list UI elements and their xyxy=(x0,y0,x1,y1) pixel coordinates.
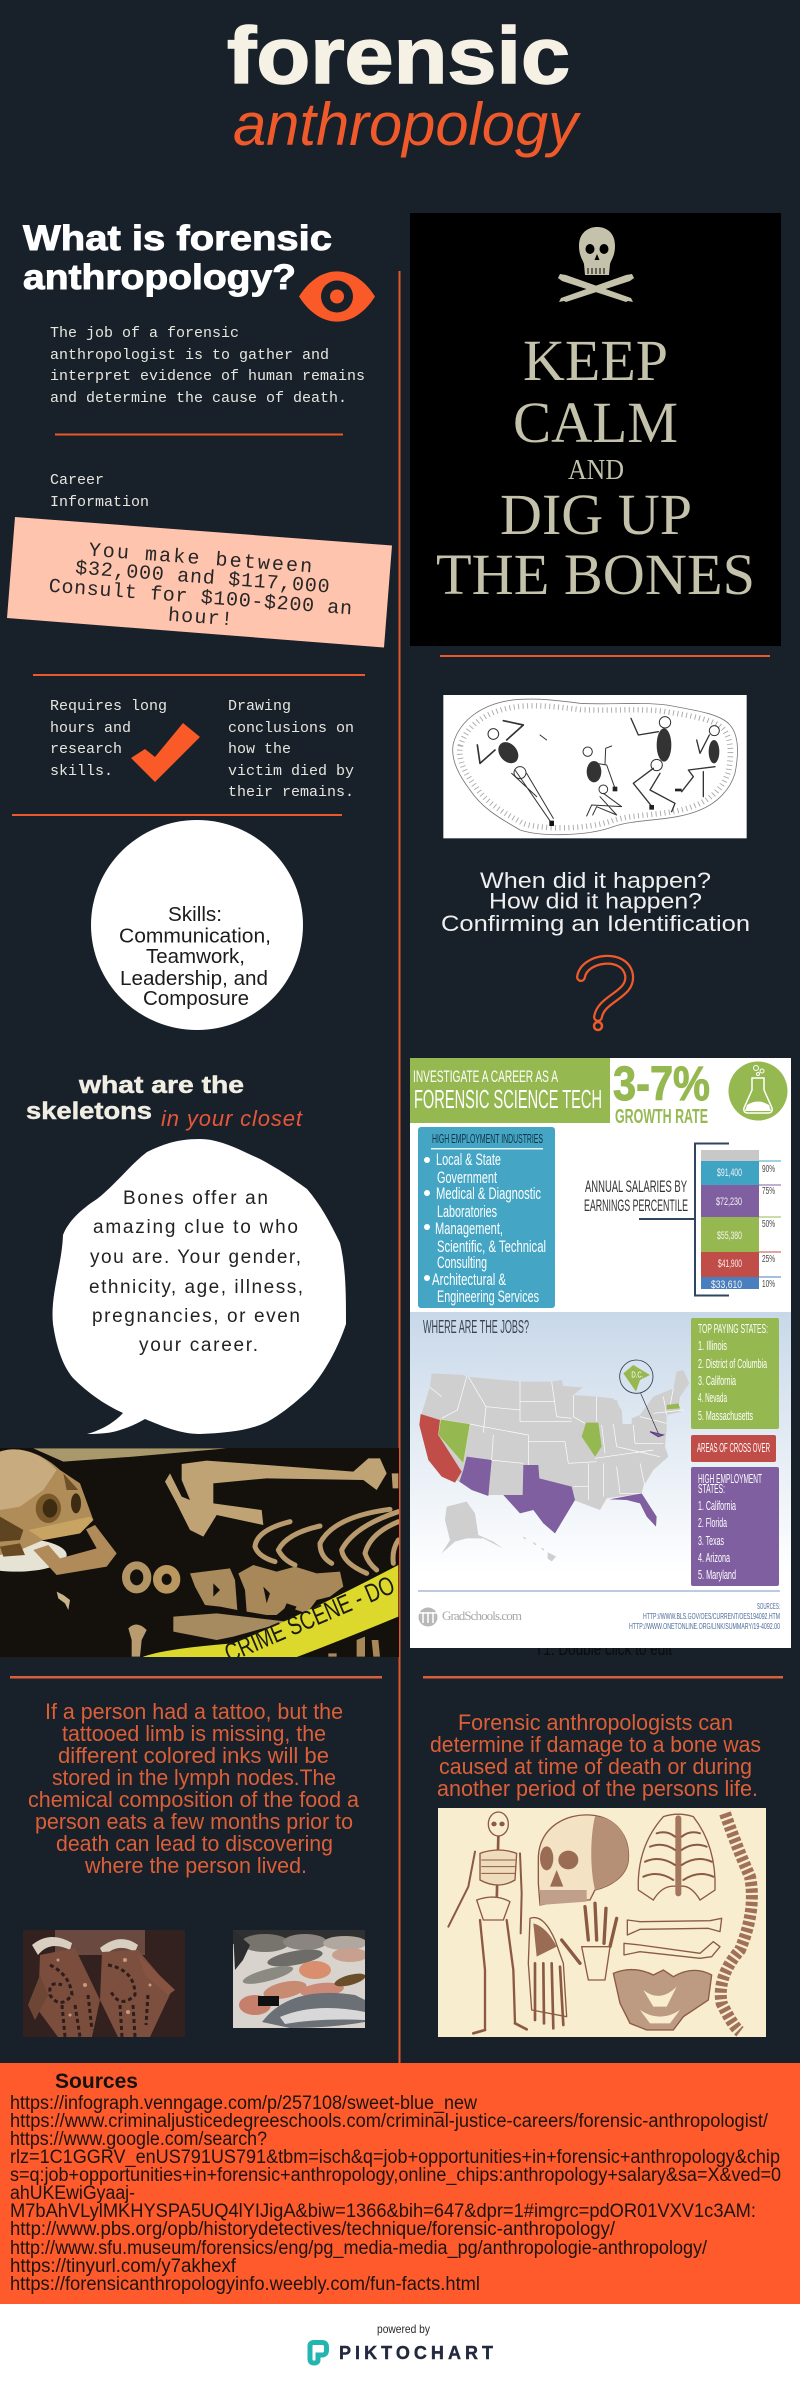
definition text xyxy=(50,325,365,407)
footer: powered by piktochart: powered by xyxy=(377,2322,430,2336)
long bones xyxy=(627,1918,722,1935)
bar chart: salaries by percentile: 10% xyxy=(762,1279,775,1290)
panel: sources: https://forensicanthropologyinfo.weebly.com/fun-facts.html xyxy=(10,2274,480,2295)
text: bone damage: Forensic anthropologists can xyxy=(458,1710,733,1735)
panel: high employment states: 5. Maryland xyxy=(698,1568,736,1582)
skeleton xyxy=(448,1812,527,2033)
icon: piktochart logo xyxy=(310,2342,326,2363)
hidden placeholder text under infographic: T1: Double click to edit xyxy=(535,1639,672,1659)
panel: top paying states: 4. Nevada xyxy=(698,1391,727,1405)
photo: skeleton with crime scene tape xyxy=(0,1447,400,1668)
callout: skills circle: Skills: xyxy=(168,904,222,926)
icon: skull and crossbones xyxy=(558,227,634,302)
text: tattoo and food evidence: stored in the lymph nodes.The xyxy=(52,1765,336,1790)
text: drawing conclusions: conclusions on xyxy=(228,720,354,737)
poster: keep calm and dig up the bones: CALM xyxy=(513,390,678,455)
bar chart: salaries by percentile: $72,230 xyxy=(716,1196,742,1208)
career information label: Career xyxy=(50,472,104,489)
panel: sources: s=q:job+opportunities+in+forensic+anthropology,online_chips:anthropology+salary&sa=X&ved=0 xyxy=(10,2165,781,2186)
text: tattoo and food evidence: chemical composition of the food a xyxy=(28,1787,360,1812)
text: tattoo and food evidence: person eats a few months prior to xyxy=(35,1809,353,1834)
callout: salary: hour! xyxy=(167,605,234,632)
heading: what is forensic anthropology: anthropology? xyxy=(23,258,296,297)
skeleton figures xyxy=(477,717,719,826)
infographic: forensic science tech career xyxy=(410,1058,791,1648)
bar chart: salaries by percentile: $91,400 xyxy=(717,1167,742,1179)
career information label: Information xyxy=(50,494,149,511)
spine xyxy=(721,1813,752,2032)
icon: eye xyxy=(299,271,375,322)
heading: what are the skeletons in your closet xyxy=(26,1072,303,1131)
callout: speech bubble about bones: Bones offer an xyxy=(123,1188,268,1209)
infographic sources: SOURCES: xyxy=(757,1602,780,1611)
panel: sources: Sources xyxy=(55,2070,138,2093)
panel: top paying states xyxy=(691,1318,779,1429)
foot xyxy=(528,1918,567,2017)
poster: keep calm and dig up the bones: THE BONES xyxy=(436,542,755,607)
poster: keep calm and dig up the bones: DIG UP xyxy=(500,482,692,547)
callout: skills circle: Leadership, and xyxy=(120,968,268,990)
callout: speech bubble about bones xyxy=(53,1139,346,1434)
pelvis xyxy=(613,1970,712,2030)
title xyxy=(227,11,582,158)
panel: high employment industries: Management, xyxy=(435,1219,503,1238)
vertebrae xyxy=(126,1565,343,1618)
growth rate stat: GROWTH RATE xyxy=(615,1106,708,1128)
panel: high employment industries: Laboratories xyxy=(437,1202,497,1221)
bowl xyxy=(0,1538,67,1572)
map: united states xyxy=(419,1360,689,1561)
panel: where are the jobs background xyxy=(410,1312,791,1574)
heading: what are the skeletons in your closet: skeletons xyxy=(26,1098,152,1125)
footer: powered by piktochart xyxy=(0,2304,800,2385)
panel: high employment industries: Scientific, & Technical xyxy=(437,1237,546,1256)
text: investigation questions: Confirming an Identification xyxy=(441,911,750,936)
panel: high employment industries: HIGH EMPLOYMENT INDUSTRIES xyxy=(432,1132,543,1146)
panel: high employment states xyxy=(691,1467,779,1586)
callout: skills circle: Composure xyxy=(143,988,249,1010)
heading: what are the skeletons in your closet: what are the xyxy=(78,1072,244,1099)
growth rate stat xyxy=(613,1058,710,1128)
panel: high employment industries: Local & State xyxy=(436,1150,501,1169)
bar chart: salaries by percentile: 50% xyxy=(762,1219,775,1230)
legend: areas of cross over xyxy=(691,1435,776,1462)
text: bone damage: caused at time of death or during xyxy=(439,1754,752,1779)
panel: high employment states: 2. Florida xyxy=(698,1516,727,1530)
text: hours and research: Requires long xyxy=(50,698,167,715)
header banner xyxy=(410,1058,610,1123)
panel: high employment industries xyxy=(418,1127,555,1308)
text: tattoo and food evidence: where the person lived. xyxy=(84,1853,307,1878)
panel: sources: https://infograph.venngage.com/p/257108/sweet-blue_new xyxy=(10,2093,477,2114)
growth rate stat: 3-7% xyxy=(613,1058,710,1111)
panel: high employment states: 1. California xyxy=(698,1499,736,1513)
header banner: INVESTIGATE A CAREER AS A xyxy=(413,1067,558,1086)
photo: henna tattooed hands xyxy=(23,1930,185,2037)
callout: skills circle: Teamwork, xyxy=(146,946,245,968)
panel: sources: http://www.pbs.org/opb/historydetectives/technique/forensic-anthropology/ xyxy=(10,2219,616,2240)
ribs xyxy=(255,1509,398,1573)
text: tattoo and food evidence: If a person had a tattoo, but the xyxy=(45,1699,343,1724)
callout: skills circle xyxy=(91,820,303,1030)
bar chart: salaries by percentile: 90% xyxy=(762,1164,775,1175)
icon: check mark xyxy=(131,723,200,782)
title: forensic xyxy=(227,11,570,100)
text: tattoo and food evidence: tattooed limb is missing, the xyxy=(62,1721,326,1746)
text: investigation questions: When did it happen? xyxy=(480,868,711,893)
photo: fish on ice xyxy=(233,1930,368,2028)
callout: salary: You make between xyxy=(88,540,313,579)
panel: high employment industries: Engineering Services xyxy=(437,1287,539,1306)
poster: keep calm and dig up the bones: AND xyxy=(568,454,624,486)
logo: GradSchools xyxy=(418,1608,522,1626)
crime scene tape xyxy=(143,1565,398,1658)
definition text: and determine the cause of death. xyxy=(50,390,347,407)
callout: speech bubble about bones: you are. Your gender, xyxy=(90,1247,301,1268)
text: investigation questions: How did it happen? xyxy=(489,888,702,914)
chart label: annual salaries: ANNUAL SALARIES BY xyxy=(585,1177,687,1196)
panel: high employment industries: Consulting xyxy=(437,1253,487,1272)
callout: salary xyxy=(7,517,392,648)
bar chart: salaries by percentile: 25% xyxy=(762,1254,775,1265)
humerus and scapula xyxy=(165,1458,387,1537)
text: drawing conclusions: how the xyxy=(228,741,291,758)
callout: speech bubble about bones: pregnancies, or even xyxy=(92,1306,300,1327)
panel: high employment states: STATES: xyxy=(698,1482,725,1496)
panel: sources: https://www.criminaljusticedegreeschools.com/criminal-justice-careers/forensic-anthropologist/ xyxy=(10,2111,769,2132)
text: hours and research: skills. xyxy=(50,763,113,780)
bar chart: salaries by percentile: $41,900 xyxy=(718,1258,742,1270)
text: hours and research xyxy=(50,698,167,780)
hand xyxy=(562,1903,617,1963)
panel: high employment states: 4. Arizona xyxy=(698,1551,730,1565)
text: hours and research: hours and xyxy=(50,720,131,737)
text: drawing conclusions: Drawing xyxy=(228,698,291,715)
text: hours and research: research xyxy=(50,741,122,758)
panel: high employment industries: Medical & Diagnostic xyxy=(436,1184,541,1203)
footer: powered by piktochart: PIKTOCHART xyxy=(339,2343,493,2363)
text: tattoo and food evidence: death can lead to discovering xyxy=(56,1831,333,1856)
image: skeletons in a burial pit xyxy=(443,695,747,838)
infographic sources xyxy=(629,1602,780,1631)
D.C. inset xyxy=(620,1360,658,1433)
definition text: anthropologist is to gather and xyxy=(50,347,329,364)
skull xyxy=(538,1815,628,1905)
text: drawing conclusions xyxy=(228,698,354,801)
panel: top paying states: 3. California xyxy=(698,1374,736,1388)
bar chart: salaries by percentile: $55,380 xyxy=(717,1230,742,1242)
panel: sources: http://www.sfu.museum/forensics/eng/pg_media-media_pg/anthropologie-anthropology/ xyxy=(10,2238,708,2259)
panel: sources: M7bAhVLylMKHYSPA5UQ4lYIJigA&biw=1366&bih=647&dpr=1#imgrc=pdOR01VXV1c3AM: xyxy=(10,2201,756,2222)
panel: sources xyxy=(0,2063,800,2304)
text: tattoo and food evidence: different colored inks will be xyxy=(58,1743,329,1768)
illustration: human bones xyxy=(438,1808,766,2037)
jaw xyxy=(33,1525,117,1575)
bar chart: salaries by percentile xyxy=(639,1144,781,1296)
panel: high employment industries: Government xyxy=(437,1168,497,1187)
callout: salary: $32,000 and $117,000 xyxy=(74,557,330,600)
text: investigation questions xyxy=(441,868,750,936)
panel: sources: rlz=1C1GGRV_enUS791US791&tbm=isch&q=job+opportunities+in+forensic+anthropology&chip xyxy=(10,2147,780,2168)
heading: what is forensic anthropology xyxy=(23,219,332,297)
skull xyxy=(0,1449,93,1555)
panel: top paying states: 1. Illinois xyxy=(698,1339,727,1353)
panel: high employment industries: Architectural & xyxy=(432,1270,506,1289)
heading: where are the jobs: WHERE ARE THE JOBS? xyxy=(423,1317,529,1337)
icon: flask xyxy=(728,1062,788,1120)
poster: keep calm and dig up the bones xyxy=(410,213,781,646)
highlighted states xyxy=(419,1414,462,1483)
center vertical divider xyxy=(398,271,400,2063)
definition text: The job of a forensic xyxy=(50,325,239,342)
icon: question mark xyxy=(581,960,629,1030)
text: bone damage xyxy=(430,1710,761,1801)
career information label xyxy=(50,472,149,511)
chart label: annual salaries: EARNINGS PERCENTILE xyxy=(584,1196,688,1215)
photo: skeleton with crime scene tape: CRIME SCENE - DO xyxy=(220,1570,399,1668)
header banner: FORENSIC SCIENCE TECH xyxy=(414,1084,602,1114)
callout: speech bubble about bones: amazing clue to who xyxy=(93,1217,298,1238)
text: drawing conclusions: victim died by xyxy=(228,763,354,780)
panel: high employment states: 3. Texas xyxy=(698,1534,724,1548)
logo: GradSchools: GradSchools.com xyxy=(442,1608,522,1623)
title: anthropology xyxy=(233,91,582,158)
chart label: annual salaries xyxy=(584,1177,688,1215)
text: tattoo and food evidence xyxy=(28,1699,360,1878)
callout: skills circle: Communication, xyxy=(119,926,271,948)
text: drawing conclusions: their remains. xyxy=(228,784,354,801)
heading: what are the skeletons in your closet: in your closet xyxy=(161,1106,303,1131)
heading: what is forensic anthropology: What is forensic xyxy=(23,219,332,258)
panel: sources: https://www.google.com/search? xyxy=(10,2129,267,2150)
bar chart: salaries by percentile: $33,610 xyxy=(711,1279,742,1291)
D.C. inset: D.C. xyxy=(631,1370,643,1379)
definition text: interpret evidence of human remains xyxy=(50,368,365,385)
callout: speech bubble about bones: ethnicity, age, illness, xyxy=(89,1277,303,1298)
rib cage xyxy=(638,1814,715,1900)
callout: salary: Consult for $100-$200 an xyxy=(48,576,353,621)
bar chart: salaries by percentile: 75% xyxy=(762,1186,775,1197)
callout: speech bubble about bones: your career. xyxy=(139,1335,258,1356)
panel: sources: ahUKEwiGyaaj- xyxy=(10,2183,135,2204)
text: bone damage: another period of the persons life. xyxy=(437,1776,758,1801)
text: bone damage: determine if damage to a bone was xyxy=(430,1732,761,1757)
poster: keep calm and dig up the bones: KEEP xyxy=(523,328,668,393)
panel: top paying states: 5. Massachusetts xyxy=(698,1409,753,1423)
panel: sources: https://tinyurl.com/y7akhexf xyxy=(10,2256,237,2277)
